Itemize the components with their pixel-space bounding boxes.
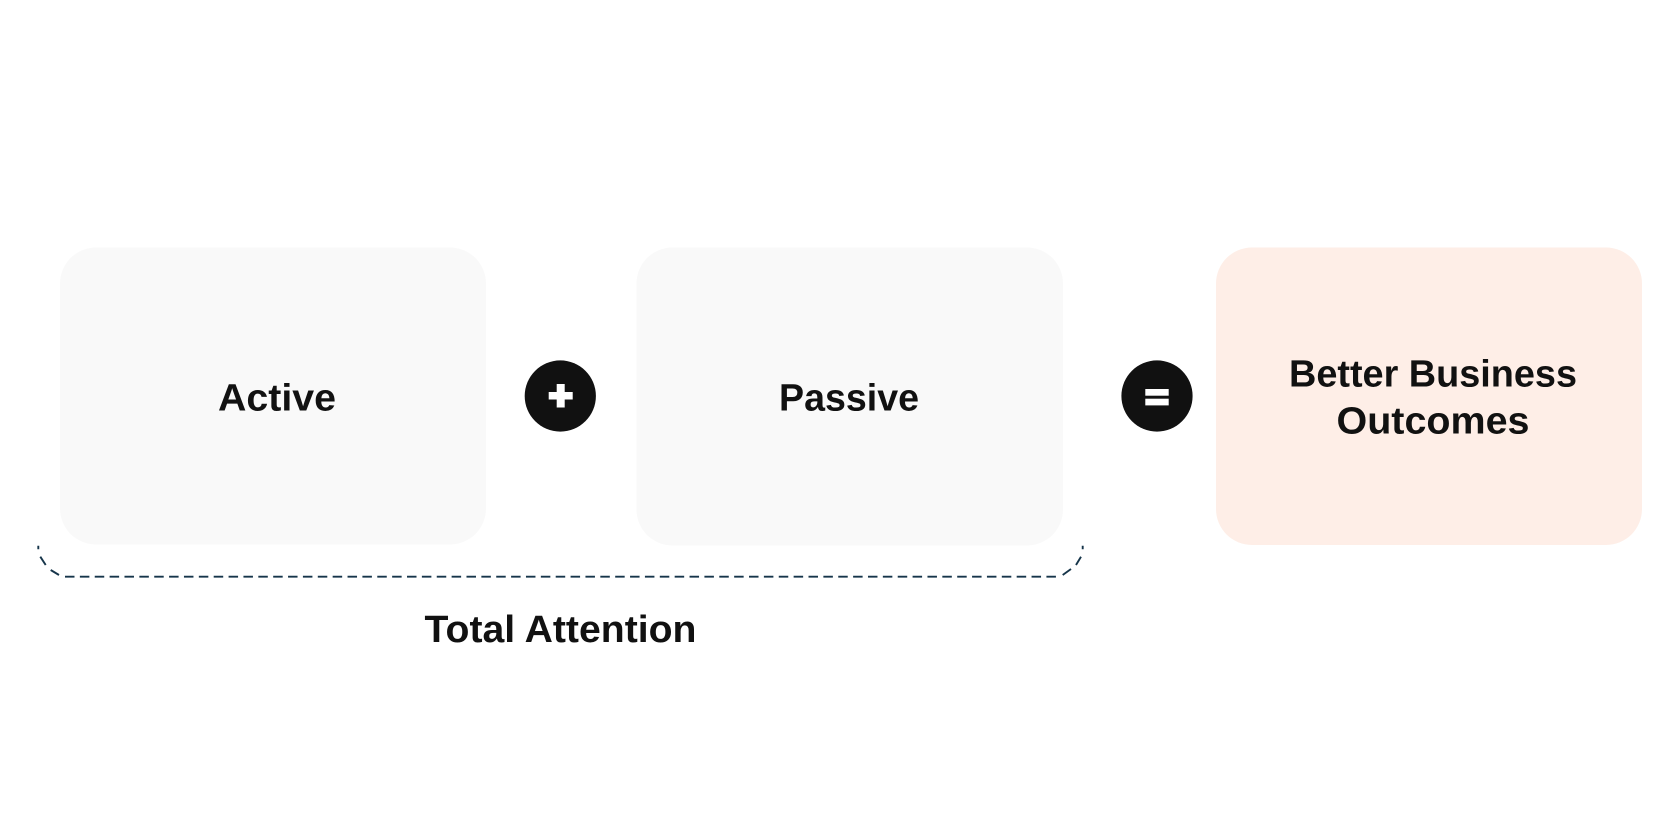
bracket: total attention: [38, 546, 1083, 577]
icon: plus operator: [525, 360, 596, 432]
panel: better business outcomes: Better Business: [1289, 354, 1577, 396]
panel: passive: [636, 248, 1063, 546]
panel: active: Active: [218, 378, 336, 420]
panel: better business outcomes: Outcomes: [1336, 400, 1530, 442]
panel: active: [60, 248, 486, 544]
panel: passive: Passive: [779, 378, 919, 420]
label: total attention: Total Attention: [424, 609, 696, 651]
icon: equals operator: [1121, 360, 1193, 432]
panel: better business outcomes: [1216, 248, 1642, 545]
